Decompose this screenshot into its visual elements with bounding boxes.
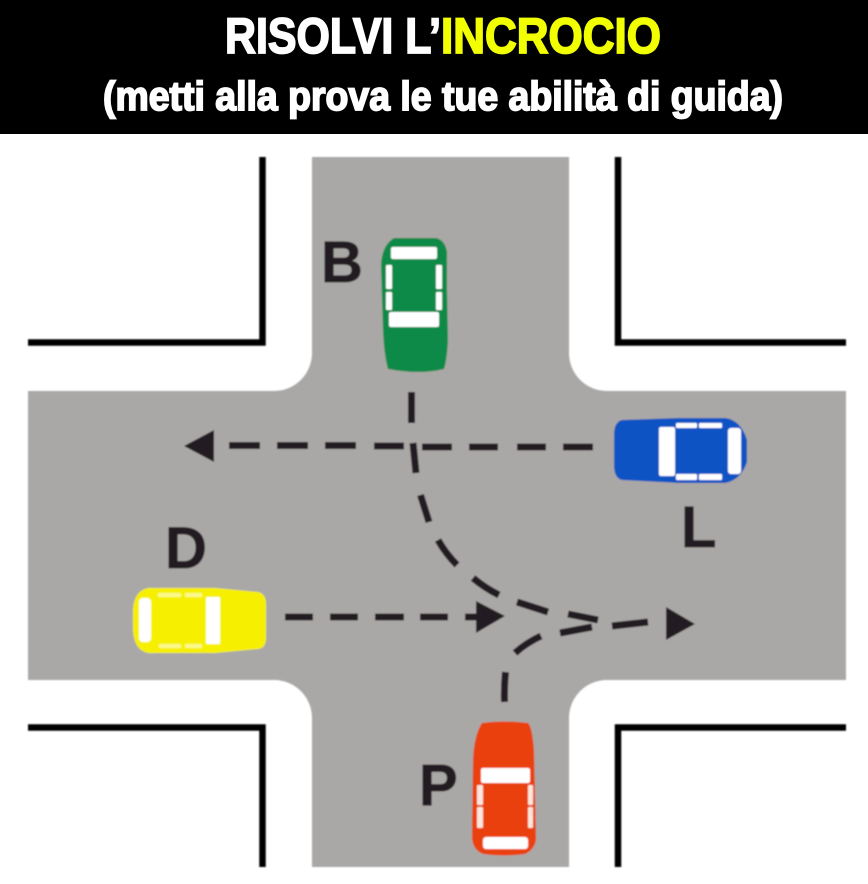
path of car D: dashed arrow straight on [285,601,505,633]
label B: B [321,230,363,295]
label L: L [681,495,716,560]
kerb line: top left [28,157,262,342]
header band [0,0,868,134]
title: INCROCIO [441,8,661,64]
path of car B: dashed curve to the right [412,392,695,640]
kerb line: top right [618,157,846,342]
label D: D [165,516,207,581]
car D: yellow [133,588,266,653]
path of car P: dashed curve to the right [504,627,592,702]
car L: blue [614,418,747,483]
label P: P [419,753,458,818]
car P: red [472,722,536,856]
title [225,8,661,64]
car B: green [381,238,448,372]
intersection diagram [28,157,846,867]
path of car L: dashed arrow to the left [184,430,593,462]
subtitle: (metti alla prova le tue abilità di guida) [103,73,783,119]
road [28,157,846,867]
kerb line: bottom left [28,728,262,867]
title: RISOLVI L’ [225,8,441,64]
kerb line: bottom right [618,728,846,867]
